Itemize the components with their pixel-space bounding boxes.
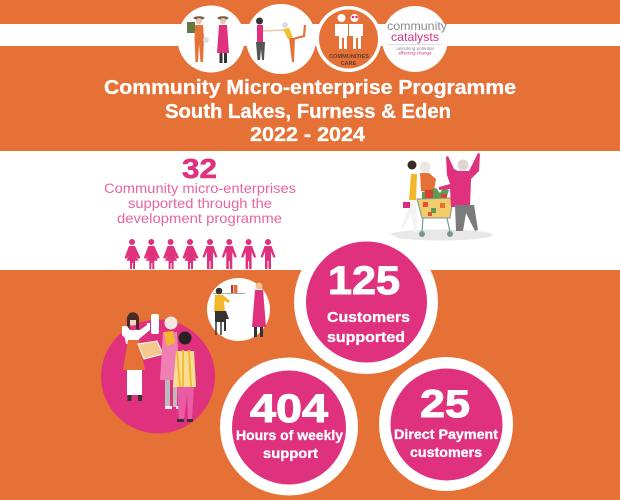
stat: 25 direct payment: 25 (420, 383, 470, 426)
title: South Lakes, Furness & Eden (165, 101, 451, 123)
illustration: shoppers with trolley (389, 153, 493, 240)
stat: 404 hours: support (263, 446, 319, 461)
title: 2022 - 2024 (250, 124, 366, 146)
stat: 32 micro-enterprises: Community micro-enterprises (104, 180, 296, 196)
logo: Communities Care: CARE (341, 61, 357, 67)
stat: 404 hours: 404 (250, 387, 329, 431)
stat: 125 customers (294, 230, 438, 374)
logo: Communities Care: COMMUNITIES (329, 54, 369, 60)
logo: yoga pair (246, 4, 316, 74)
title (104, 77, 516, 146)
illustration: small circle cafe (207, 278, 270, 341)
stat: 125 customers: 125 (328, 259, 400, 303)
stat: 25 direct payment: customers (410, 445, 482, 460)
stat: 25 direct payment (379, 357, 513, 491)
logo: community catalysts: effecting change (399, 50, 432, 56)
stat: 32 micro-enterprises: development programme (117, 210, 282, 226)
stat: 125 customers: supported (327, 329, 405, 346)
logo: gardeners (178, 6, 244, 72)
title: Community Micro-enterprise Programme (104, 77, 516, 99)
stat: 32 micro-enterprises: supported through the (128, 195, 272, 211)
logo: community catalysts: community (387, 19, 447, 33)
stat: 32 micro-enterprises (104, 153, 296, 226)
stat: 32 micro-enterprises: 32 (182, 153, 217, 184)
logo: Communities Care (316, 6, 382, 72)
logo: community catalysts: catalysts (391, 30, 439, 44)
logo: community catalysts: unlocking potential (396, 46, 434, 51)
logo: community catalysts (382, 6, 448, 72)
icon row: people (124, 239, 276, 269)
illustration: bakers on pink circle (101, 312, 215, 434)
stat: 404 hours: Hours of weekly (236, 428, 344, 443)
stat: 25 direct payment: Direct Payment (394, 427, 499, 442)
stat: 125 customers: Customers (327, 309, 410, 326)
stat: 404 hours (220, 358, 358, 496)
